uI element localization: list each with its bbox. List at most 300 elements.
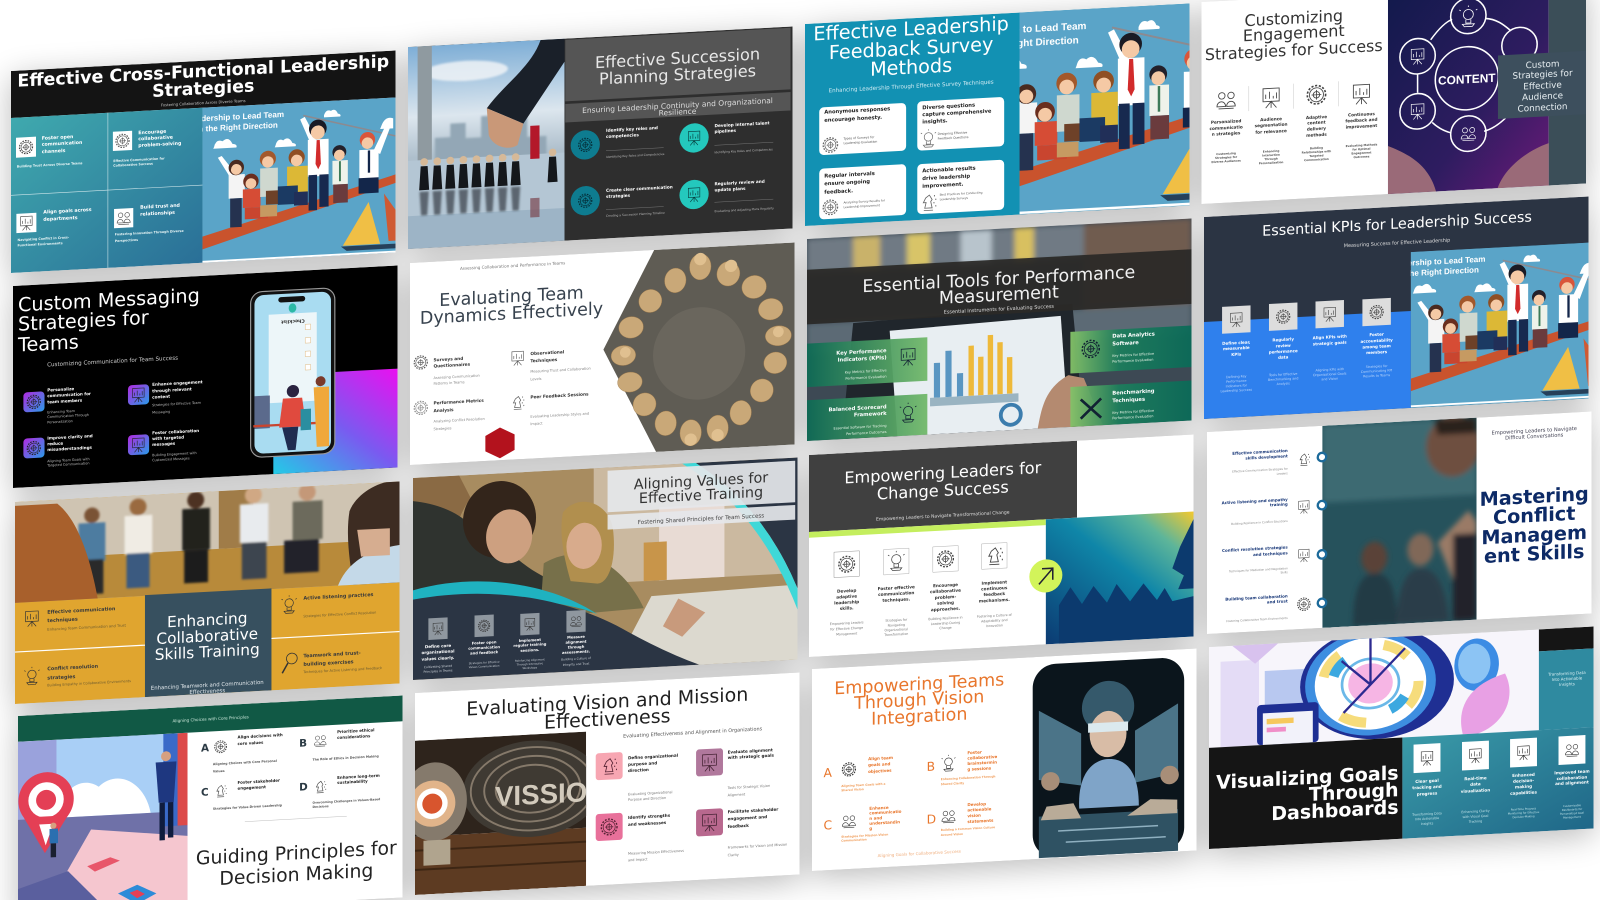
item: active listening <box>282 591 376 620</box>
item: identify strengths: and Impact <box>628 857 648 862</box>
step: measure alignment: Integrity and Trust <box>563 661 590 667</box>
item: observational: Techniques <box>530 357 558 364</box>
caption: Transforming Data <box>1547 670 1586 677</box>
title: Integration <box>871 705 967 730</box>
card: actionable results: Leadership Surveys <box>940 196 969 201</box>
step: measure alignment: Building a Culture of <box>561 656 592 662</box>
step: measure alignment: Measure <box>567 635 585 640</box>
kpi: define clear: Performance <box>1226 379 1246 384</box>
photo: vision bulb <box>415 732 586 895</box>
item: conflict resolution: Conflict resolution strategies <box>1222 544 1288 553</box>
panel: Customizing Engagement Strategies for Success <box>1202 0 1586 204</box>
step: foster open: communication <box>468 645 500 651</box>
step: feedback: mechanisms. <box>979 597 1010 604</box>
step: implement training: Workshops <box>523 665 538 670</box>
item: improve clarity: Targeted Communication <box>46 461 90 468</box>
card: enhanced decision-making: Decision-Making <box>1512 814 1535 819</box>
card: improved team collaboration: Customizable <box>1563 803 1581 808</box>
callout box: Connection <box>1518 102 1568 115</box>
item: develop internal talent: pipelines <box>714 128 737 134</box>
item: evaluate alignment: Evaluate alignment <box>728 747 773 755</box>
step: communication: Transformation <box>883 632 908 637</box>
item: regularly review <box>679 180 774 212</box>
title: Evaluating Team <box>439 283 584 311</box>
tool: data analytics: Data Analytics <box>1112 332 1155 340</box>
header block <box>809 441 1077 532</box>
card: anonymous responses <box>819 103 906 155</box>
photo: ring of wooden pegs <box>603 242 794 455</box>
item: evaluate alignment: with strategic goals <box>728 753 775 760</box>
step: adaptive skills: Develop <box>837 588 856 594</box>
subtitle: Customizing Communication for Team Success <box>47 356 178 369</box>
item: communication skills: Effective Communication Strategies for <box>1232 467 1289 474</box>
dark lower panel <box>413 581 699 680</box>
item: personalize: Enhancing Team <box>47 409 75 414</box>
item: identify strengths: Measuring Mission Effectiveness <box>628 849 684 856</box>
kpi: define clear <box>1220 305 1252 393</box>
card: actionable results: improvement. <box>922 182 963 190</box>
item: regularly review: Evaluating and Adjusting Plans Regularly <box>714 206 774 213</box>
panel: Enhancing Collaborative Skills Training <box>15 479 400 705</box>
item C: Strategies for Value-Driven Leadership <box>213 803 283 811</box>
item: performance metrics: Analysis <box>433 407 454 414</box>
panel: Effective Leadership Feedback Survey Methods <box>805 4 1190 226</box>
item: observational: Measuring Trust and Collaboration <box>530 367 591 374</box>
kpi: regularly review: review <box>1276 343 1291 348</box>
item: effective communication: Effective communication <box>47 606 116 616</box>
item C: Strategies for Mission-Vision <box>841 832 888 839</box>
tool: balanced scorecard: Framework <box>854 411 887 419</box>
item: encourage collaborative problem-solving: Encourage <box>138 129 166 136</box>
title box: Aligning Values for <box>634 470 768 493</box>
item: observational: Levels <box>530 377 542 381</box>
panel: Mastering Conflict Management Skills <box>1207 408 1592 634</box>
step: communication: Organizational <box>885 627 908 632</box>
item: peer feedback: Peer Feedback Sessions <box>530 391 589 401</box>
panel: Empowering Leaders for Change Success <box>809 434 1194 657</box>
item: surveys: Surveys and <box>433 356 463 363</box>
item: team collaboration: and trust <box>1267 598 1288 605</box>
icon: lime arrow circle <box>1029 558 1062 593</box>
title block: Skills Training <box>155 640 260 664</box>
item A: objectives <box>868 768 892 774</box>
item: align goals across departments <box>16 207 92 248</box>
item: conflict resolution <box>24 662 131 689</box>
item: performance metrics: Strategies <box>433 426 452 431</box>
item: adaptive content <box>1302 85 1331 162</box>
item D: Overcoming Challenges in Values-Based <box>313 797 380 805</box>
item: foster open communication: channels <box>42 148 66 155</box>
illustration: team: in the Right Direction <box>1397 265 1479 279</box>
item: performance metrics <box>414 398 485 432</box>
step: define core: organizational <box>421 648 455 655</box>
step: implement training: sessions. <box>520 648 540 653</box>
item: peer feedback: Evaluating Leadership Styles and <box>530 412 589 419</box>
card: anonymous responses: Leadership Evaluation <box>843 140 877 145</box>
step: feedback: continuous <box>981 585 1008 592</box>
card: diverse questions: Feedback Questions <box>938 135 969 141</box>
item: define purpose: Define organizational <box>628 753 679 760</box>
item: continuous feedback: Continuous <box>1348 111 1375 118</box>
item A: Shared Vision <box>841 787 864 792</box>
callout box: Effective <box>1523 80 1562 93</box>
step: define core: Cultivating Shared <box>424 664 452 669</box>
tool: benchmarking: Techniques <box>1112 397 1145 404</box>
phone illustration: Checklist <box>280 317 305 325</box>
item: create clear communication: Creating a Succession Planning Timeline <box>606 211 665 218</box>
item: encourage collaborative problem-solving: problem-solving <box>138 141 181 149</box>
item: audience segmentation: Enhancing <box>1263 149 1279 154</box>
item: surveys: Questionnaires <box>433 362 471 370</box>
tool: data analytics: Key Metrics for Effective <box>1112 352 1154 358</box>
title band: Measurement <box>939 283 1059 309</box>
item: enhance engagement: Enhance engagement <box>152 379 203 387</box>
tool: key performance indicators: Key Performance <box>836 348 887 357</box>
item: audience segmentation: Interaction <box>1262 153 1280 158</box>
title band: Essential Instruments for Evaluating Success <box>944 304 1054 316</box>
kpi: regularly review: performance <box>1269 348 1298 355</box>
item: active listening: Strategies for Effective Conflict Resolution <box>303 611 376 618</box>
item A: goals and <box>868 761 890 767</box>
title: ent Skills <box>1484 540 1584 568</box>
panel: Effective Cross-Functional Leadership Strategies <box>11 50 396 273</box>
title box <box>565 28 791 101</box>
item: active listening: Building Resilience in Conflict Situations <box>1231 519 1288 526</box>
card: enhanced decision-making: Enhanced <box>1512 772 1535 778</box>
title: Managem <box>1481 521 1587 549</box>
panel: Guiding Principles for Decision Making <box>18 696 403 900</box>
title box: Effective Succession <box>595 44 760 72</box>
step: problem solving: solving <box>937 600 954 606</box>
item: improve clarity: Aligning Team Goals with <box>47 457 90 463</box>
item B: B <box>927 760 935 774</box>
item: foster collaboration <box>128 428 199 464</box>
item: observational <box>512 348 591 382</box>
step: communication <box>878 548 915 637</box>
step: problem solving: Leadership During <box>931 621 960 626</box>
item: teamwork <box>282 648 382 675</box>
step: implement training: Through Interactive <box>516 661 543 667</box>
item: enhance engagement: Messaging <box>152 410 170 415</box>
subtitle box: Ensuring Leadership Continuity and Organizational <box>582 96 773 115</box>
step: communication: communication <box>878 590 914 597</box>
item: align goals across departments: Align goals across <box>43 207 92 216</box>
tool: benchmarking: Key Metrics for Effective <box>1112 409 1154 415</box>
item: foster collaboration: Customized Messages <box>152 456 190 462</box>
kpi: foster accountability: among team <box>1362 343 1391 350</box>
card: regular intervals: Leadership Improvement <box>843 203 881 209</box>
card: regular intervals: Regular intervals <box>824 171 875 180</box>
item D: Building a Common Vision Culture <box>941 825 995 832</box>
caption: Into Actionable <box>1552 675 1583 682</box>
kpi: foster accountability: members <box>1366 349 1388 355</box>
card: regular intervals: ensure ongoing <box>824 179 870 187</box>
tool: benchmarking: Performance Evaluation <box>1112 414 1153 420</box>
callout box <box>1498 52 1573 119</box>
title block <box>1209 738 1402 849</box>
panel: Visualizing Goals Through Dashboards <box>1209 616 1594 849</box>
item: adaptive content: Relationships with <box>1302 149 1331 155</box>
title: Effective Cross-Functional Leadership <box>17 52 389 92</box>
item D <box>299 773 380 810</box>
card: improved team collaboration: Management <box>1563 815 1581 820</box>
title: Customizing <box>1244 6 1343 30</box>
tool: key performance indicators: Key Metrics for Effective <box>845 368 887 375</box>
title: Guiding Principles for <box>196 837 397 870</box>
item: teamwork: Techniques for Active Listening and Feedback <box>302 666 382 674</box>
item: personalized communication: Personalized <box>1211 118 1241 125</box>
kpi: regularly review <box>1268 302 1298 387</box>
item C: communicatio <box>869 809 902 815</box>
tool: benchmarking: Benchmarking <box>1112 388 1155 397</box>
step: measure alignment <box>561 610 592 667</box>
card: regular intervals: feedback. <box>824 188 853 196</box>
title: Through Vision <box>853 687 984 714</box>
title block: Enhancing <box>167 609 248 631</box>
step: adaptive skills: Management <box>836 631 858 637</box>
step: problem solving: problem- <box>935 594 956 600</box>
item: personalized communication: communicatio <box>1209 124 1243 131</box>
item: conflict resolution: strategies <box>47 674 75 682</box>
step: feedback <box>977 542 1013 629</box>
kpi: foster accountability: Communicating KPI <box>1361 368 1392 374</box>
subtitle: Aligning Choices with Core Principles <box>172 714 249 723</box>
gradient block <box>273 369 398 474</box>
item: personalize <box>23 387 91 424</box>
step: communication: Strategies for <box>885 618 908 623</box>
kpi: define clear: measurable <box>1223 345 1250 351</box>
kpi: regularly review: Tools for Effective <box>1268 372 1297 377</box>
tool: key performance indicators <box>807 337 927 387</box>
title: Strategies <box>152 77 254 102</box>
title box: Effective Training <box>639 485 763 507</box>
item: identify key roles: competencies <box>606 132 639 139</box>
tool: benchmarking <box>1070 381 1192 427</box>
photo: figurines and hand <box>408 38 564 249</box>
step: adaptive skills: skills. <box>840 605 854 611</box>
card: anonymous responses: encourage honesty. <box>824 115 882 124</box>
illustration: team on seesaw: in the Right Direction <box>196 121 278 134</box>
callout box: Audience <box>1522 91 1563 103</box>
item: improve clarity <box>23 433 93 469</box>
step: define core: Define core <box>425 643 451 649</box>
item: teamwork: Teamwork and trust- <box>303 650 361 659</box>
item: build trust and relationships: relationships <box>140 210 175 218</box>
illustration: team <box>1410 242 1588 408</box>
item: continuous feedback: improvement <box>1346 123 1377 130</box>
kpi: define clear: Define clear, <box>1222 339 1251 346</box>
item D: D <box>299 781 308 794</box>
kpi: align: Align KPIs with <box>1313 334 1347 340</box>
card: clear goal: progress <box>1417 790 1438 797</box>
item B: collaborative <box>967 754 998 761</box>
step: problem solving: collaborative <box>930 588 961 594</box>
item: audience segmentation: segmentation <box>1255 122 1288 128</box>
item: evaluate alignment: Tools for Strategic Vision <box>727 784 770 790</box>
title block <box>145 588 271 698</box>
card: enhanced decision-making: Real-Time Progress <box>1511 806 1537 812</box>
tool: data analytics: Performance Evaluation <box>1112 358 1153 364</box>
item: continuous feedback: Evaluating Methods <box>1346 142 1378 148</box>
kpi: regularly review: data <box>1278 354 1289 360</box>
item: build trust and relationships <box>114 202 184 243</box>
card: regular intervals <box>819 164 906 219</box>
item: conflict resolution: Skills <box>1280 570 1288 575</box>
item: personalize: team members <box>47 398 83 404</box>
title: Effectiveness <box>544 705 671 734</box>
step: adaptive skills: leadership <box>834 599 859 606</box>
item: improve clarity: reduce <box>47 441 63 446</box>
card: real-time <box>1461 741 1490 824</box>
callout box: Custom <box>1526 59 1559 71</box>
tool: balanced scorecard <box>807 394 927 441</box>
item D: Around Vision <box>941 832 963 837</box>
image: content circle: CONTENT <box>1438 71 1496 88</box>
item: surveys: Patterns in Teams <box>433 380 465 386</box>
step: feedback: feedback <box>983 591 1005 597</box>
kpi: foster accountability: accountability <box>1361 337 1393 344</box>
kpi: align <box>1313 300 1347 382</box>
item: audience segmentation <box>1255 88 1288 166</box>
item B <box>927 749 998 787</box>
card: enhanced decision-making <box>1508 738 1540 819</box>
item B: Enhancing Collaboration Through <box>941 774 996 781</box>
item: adaptive content: Building <box>1310 146 1323 150</box>
item D <box>927 801 995 838</box>
title: Empowering Teams <box>834 670 1004 699</box>
panel: Evaluating Vision and Mission Effectiveness <box>402 672 800 896</box>
illustration: team cropped: in the Right Direction <box>978 35 1079 52</box>
step: measure alignment: alignment <box>566 640 587 645</box>
item: personalized communication: Diverse Audiences <box>1211 159 1241 164</box>
subtitle box: Resilience <box>659 107 697 118</box>
title: Custom Messaging <box>18 284 200 317</box>
subtitle: Assessing Collaboration and Performance in Teams <box>460 260 565 271</box>
title: Dynamics Effectively <box>420 299 603 329</box>
item: regularly review: update plans <box>714 186 746 193</box>
item: facilitate engagement <box>696 805 787 859</box>
item: surveys: Assessing Communication <box>433 374 480 380</box>
title: Strategies for <box>18 306 149 336</box>
item: develop internal talent: Develop internal talent <box>714 120 770 128</box>
step: problem solving: Building Resilience in <box>928 615 963 621</box>
panel: Effective Succession Planning Strategies <box>408 26 792 249</box>
image: woman with holographic visor <box>1033 657 1184 858</box>
header block: Empowering Leaders for <box>844 458 1042 488</box>
title block: Visualizing Goals <box>1216 762 1399 794</box>
illustration: team on seesaw: Leadership to Lead Team <box>187 110 284 124</box>
tool: balanced scorecard: Performance Outcomes <box>846 430 887 436</box>
item: facilitate engagement: engagement and <box>728 814 767 821</box>
item: build trust and relationships: Build trust and <box>140 203 180 211</box>
card: real-time: Enhancing Clarity <box>1461 809 1490 814</box>
item C: Enhance <box>869 805 889 811</box>
subtitle: Empowering Leaders to Navigate <box>1491 426 1577 437</box>
illustration: team cropped: Leadership to Lead Team <box>967 21 1087 38</box>
item: develop internal talent: Identifying Key Roles and Competencies <box>714 147 773 154</box>
kpi: regularly review: Analysis <box>1277 381 1290 386</box>
callout box: Strategies for <box>1513 69 1573 82</box>
item: conflict resolution: and techniques <box>1253 550 1288 557</box>
item: audience segmentation: for relevance <box>1255 128 1287 135</box>
item B: B <box>299 737 307 750</box>
item: develop internal talent <box>679 121 774 154</box>
card: improved team collaboration: Improved team <box>1554 769 1590 775</box>
title box: Planning Strategies <box>599 61 756 89</box>
item: communication skills <box>1232 446 1326 478</box>
panel: Evaluating Team Dynamics Effectively <box>410 242 794 465</box>
photo: seated group <box>15 479 400 603</box>
title block: Effectiveness <box>189 688 225 696</box>
item: performance metrics: Analyzing Conflict Resolution <box>433 417 485 424</box>
item: adaptive content: Communication <box>1304 157 1329 162</box>
card: anonymous responses: Anonymous responses <box>824 106 890 116</box>
item: performance metrics: Performance Metrics <box>433 398 484 407</box>
item: regularly review: Regularly review and <box>714 179 765 186</box>
item B: Foster <box>967 749 982 755</box>
step: communication: techniques. <box>882 596 911 603</box>
item A: Align team <box>868 755 893 761</box>
item: communication skills: Effective communication <box>1232 448 1288 456</box>
title block: Through <box>1309 779 1399 806</box>
tool: key performance indicators: Indicators (KPIs) <box>838 355 887 364</box>
kpi: foster accountability: Strategies for <box>1366 364 1388 369</box>
image: silhouettes gradient <box>1046 511 1194 644</box>
item: personalize: Personalize <box>47 386 74 393</box>
title: Essential KPIs for Leadership Success <box>1262 209 1532 240</box>
item: enhance engagement: through relevant <box>152 386 192 393</box>
title: Strategies for Success <box>1205 36 1383 64</box>
item: peer feedback <box>513 391 589 427</box>
step: measure alignment: assessments. <box>562 649 591 655</box>
card: actionable results: Actionable results <box>922 166 976 174</box>
title band <box>807 249 1192 324</box>
item: personalized communication: Strategies for <box>1215 155 1238 160</box>
item: communication skills: Leaders <box>1277 471 1288 476</box>
item: enhance engagement: content <box>152 394 170 400</box>
card: actionable results: Best Practices for Conducting <box>940 190 983 197</box>
card: clear goal: Into Actionable <box>1415 816 1439 821</box>
kpi: align: Organizational Goals <box>1313 371 1347 377</box>
card: improved team collaboration <box>1554 735 1590 820</box>
item: personalize: communication for <box>47 391 92 398</box>
card: real-time: Real-time <box>1464 775 1487 781</box>
kpi: foster accountability: Foster <box>1369 332 1384 337</box>
kpi: define clear: Indicators for <box>1226 383 1248 388</box>
item: define purpose: Purpose and Direction <box>628 796 666 802</box>
item A: Aligning Team Goals with a <box>841 782 886 788</box>
card: improved team collaboration: collaboration <box>1557 774 1587 781</box>
item A: A <box>201 742 209 755</box>
item: encourage collaborative problem-solving <box>113 128 181 168</box>
card: diverse questions: Diverse questions <box>922 103 975 111</box>
item B: Prioritize ethical <box>337 727 375 734</box>
item: improve clarity: Improve clarity and <box>47 433 93 441</box>
photo: vision bulb: VISSION <box>495 775 607 812</box>
card: improved team collaboration: and alignment <box>1555 779 1589 786</box>
item: enhance engagement: Strategies for Effective Team <box>152 401 201 407</box>
header block: Empowering Leaders to Navigate Transformational Change <box>876 510 1010 523</box>
item: align goals across departments: departments <box>43 215 78 223</box>
item: evaluate alignment: Alignment <box>728 792 746 797</box>
step: define core: Principles in Teams <box>423 668 453 674</box>
kpi: regularly review: Regularly <box>1272 336 1294 342</box>
step: adaptive skills: Empowering Leaders <box>830 620 864 626</box>
step: foster open: Strategies for Effective <box>469 660 500 665</box>
item: adaptive content: Targeted <box>1309 153 1324 158</box>
step: problem solving: approaches. <box>931 606 960 612</box>
title block: Dashboards <box>1271 797 1399 825</box>
